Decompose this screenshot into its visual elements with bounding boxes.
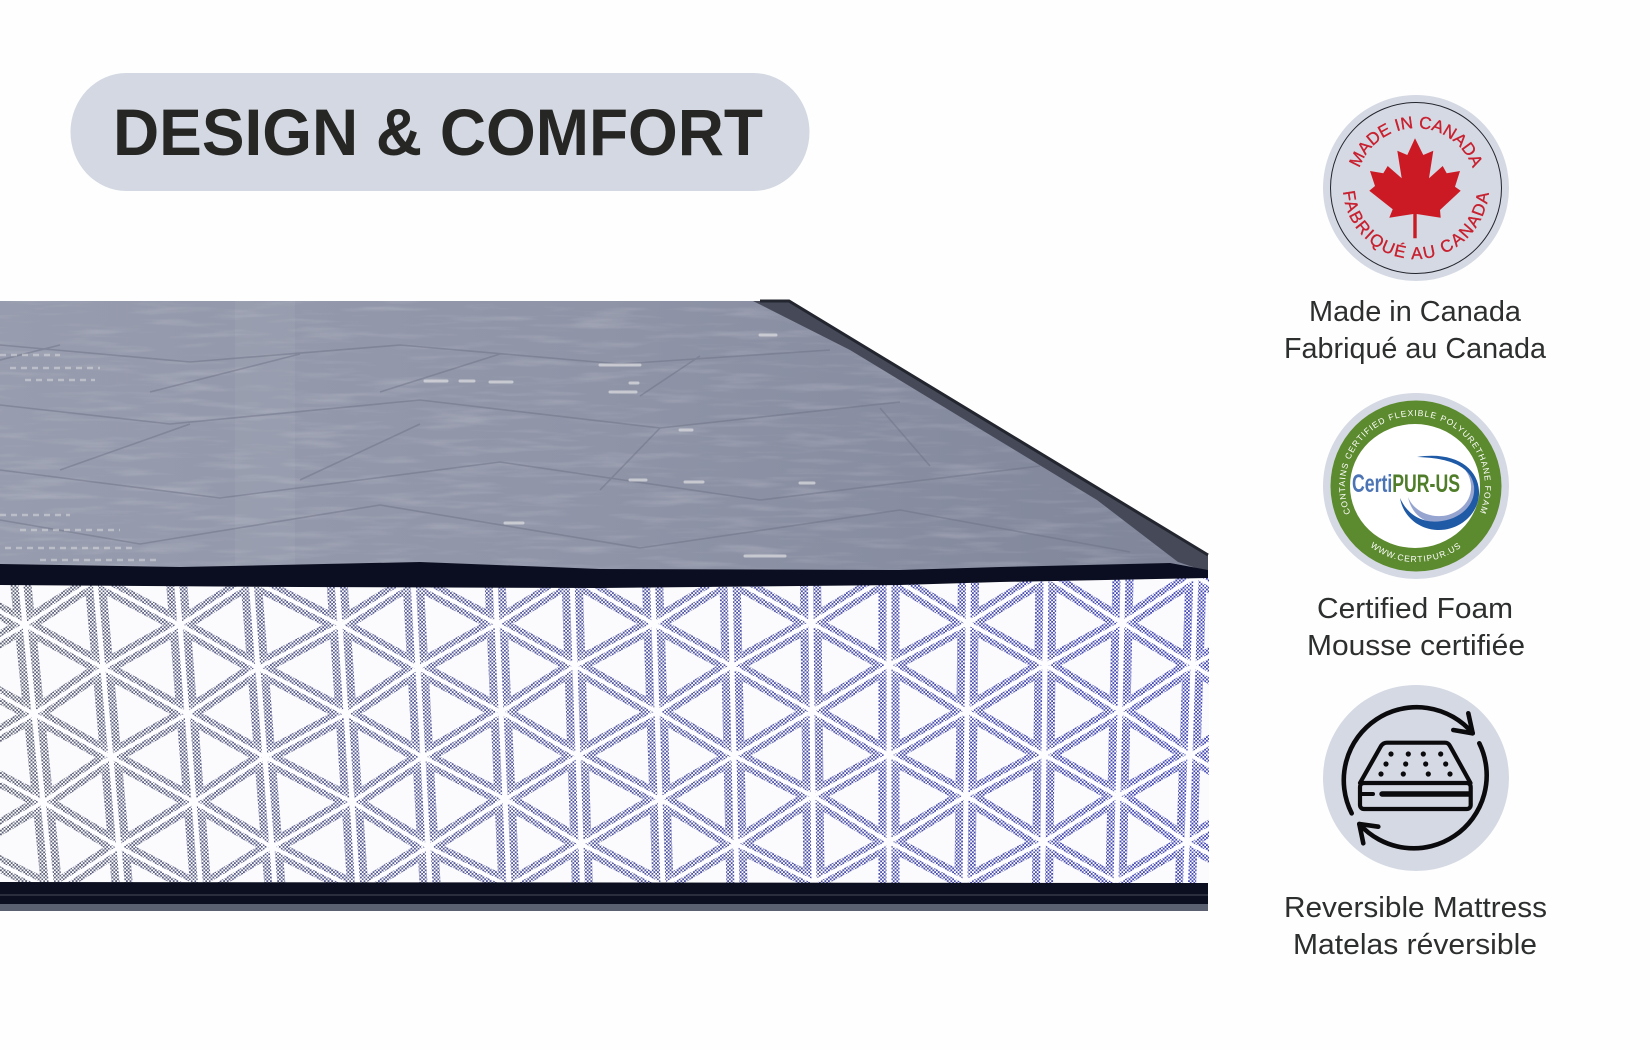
label: reversible mattress (1284, 892, 1547, 961)
lower black piping (0, 882, 1208, 911)
badge: CertiPUR-US (1323, 393, 1509, 579)
quilted side panel with triangle pattern (0, 578, 1209, 883)
badge: reversible mattress (1323, 685, 1509, 871)
label: certified foam: Mousse certifiée (1307, 630, 1525, 662)
curved url text: WWW.CERTIPUR.US (1372, 542, 1460, 562)
swoosh: light blue (1408, 458, 1475, 523)
CertiPUR-US wordmark: CertiPUR-US (1352, 470, 1460, 498)
curved certification text: CONTAINS CERTIFIED FLEXIBLE POLYURETHANE FOAM (1339, 410, 1491, 514)
swoosh: dark blue (1400, 456, 1479, 530)
icon: maple leaf (1369, 138, 1461, 238)
badge: made in Canada (1323, 95, 1509, 281)
label: made in Canada: Fabriqué au Canada (1284, 333, 1547, 365)
icon: rotation arrows (1344, 707, 1487, 848)
curved text bottom: FABRIQUÉ AU CANADA (1343, 190, 1489, 260)
label: made in Canada (1284, 296, 1547, 365)
label: reversible mattress: Reversible Mattress (1284, 892, 1547, 924)
label: reversible mattress: Matelas réversible (1293, 929, 1537, 961)
upper black piping (0, 562, 1208, 588)
label: certified foam: Certified Foam (1317, 593, 1513, 625)
label: made in Canada: Made in Canada (1309, 296, 1522, 328)
title pill (70, 73, 810, 191)
mattress top surface (0, 301, 1208, 575)
title pill: DESIGN & COMFORT (113, 95, 763, 169)
curved text top: MADE IN CANADA (1348, 116, 1482, 168)
dark right edge of mattress top (753, 301, 1208, 572)
mattress photo illustration (0, 301, 1272, 937)
label: certified foam (1307, 593, 1525, 662)
icon: mattress (1360, 743, 1471, 809)
